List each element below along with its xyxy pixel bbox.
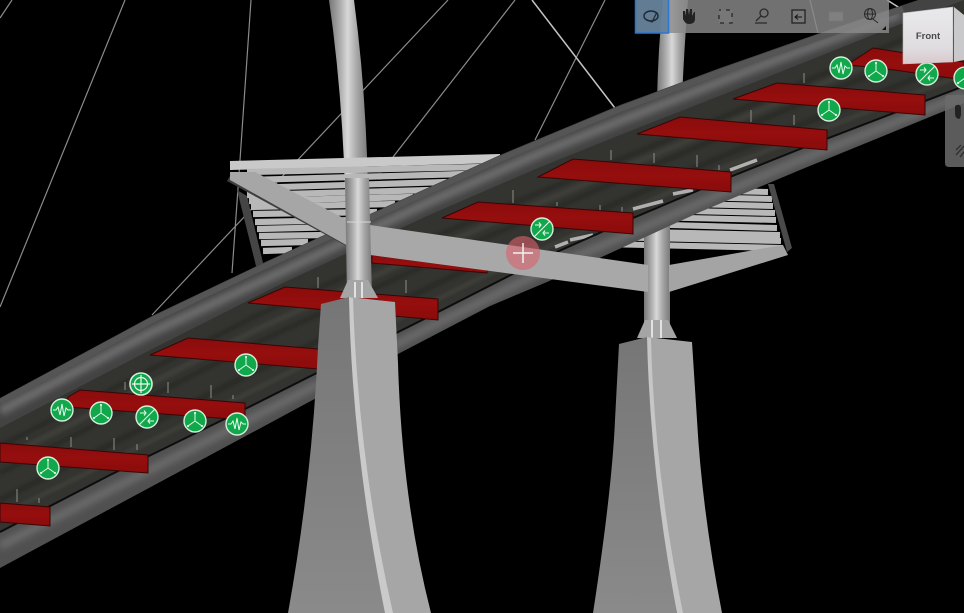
toolbar: fit view [719,10,732,23]
sensor icon: wave [830,57,852,79]
centre cross beam [370,225,648,292]
red cross beams [0,48,964,526]
viewer toolbar [635,0,889,33]
sensor icon: displacement [136,406,158,428]
suspension cables [0,0,903,315]
deck posts [17,73,804,503]
toolbar: pan hand [683,9,695,24]
sensor icon: triaxial [865,60,887,82]
left mast lower section [340,178,378,298]
right concrete pier [593,337,722,613]
sensor icon: displacement centre [531,218,553,240]
cube face label: Front [916,31,941,42]
right mast lower section [637,220,677,338]
right dark strut [768,184,792,252]
right diagonal cross beam [669,245,788,292]
panel icon: section tool [956,145,964,157]
sensor icon: wave [51,399,73,421]
left concrete pier [288,297,431,613]
right mast core over planks [644,225,670,285]
deck edge highlights [555,160,757,247]
right deck planks [600,188,783,248]
toolbar: zoom [755,9,768,23]
left diagonal cross beam [227,172,350,248]
sensor icon: displacement [916,63,938,85]
left strut [237,190,264,270]
left deck planks [230,154,500,251]
toolbar: corner marker [882,26,886,30]
toolbar: disabled button [829,12,843,21]
sensor icon: wave [226,413,248,435]
sensor icon: triaxial [235,354,257,376]
sensor icon: triaxial [37,457,59,479]
sensor icon: target [130,373,152,395]
cursor marker [506,236,540,270]
sensor icon: triaxial [818,99,840,121]
panel icon: walk tool [955,105,961,119]
sensor icon: triaxial [90,402,112,424]
right side tool panel [945,95,964,167]
toolbar: previous view [792,10,805,23]
left mast upper section [329,0,368,190]
toolbar: orbit button selected [636,0,668,33]
sensor icon: triaxial [184,410,206,432]
sensor icon: triaxial edge [954,67,964,89]
navigation cube [903,7,964,64]
upper edge girder [0,0,964,428]
toolbar: globe [864,8,878,23]
right mast upper section [657,0,688,100]
lower edge girder [0,86,964,568]
